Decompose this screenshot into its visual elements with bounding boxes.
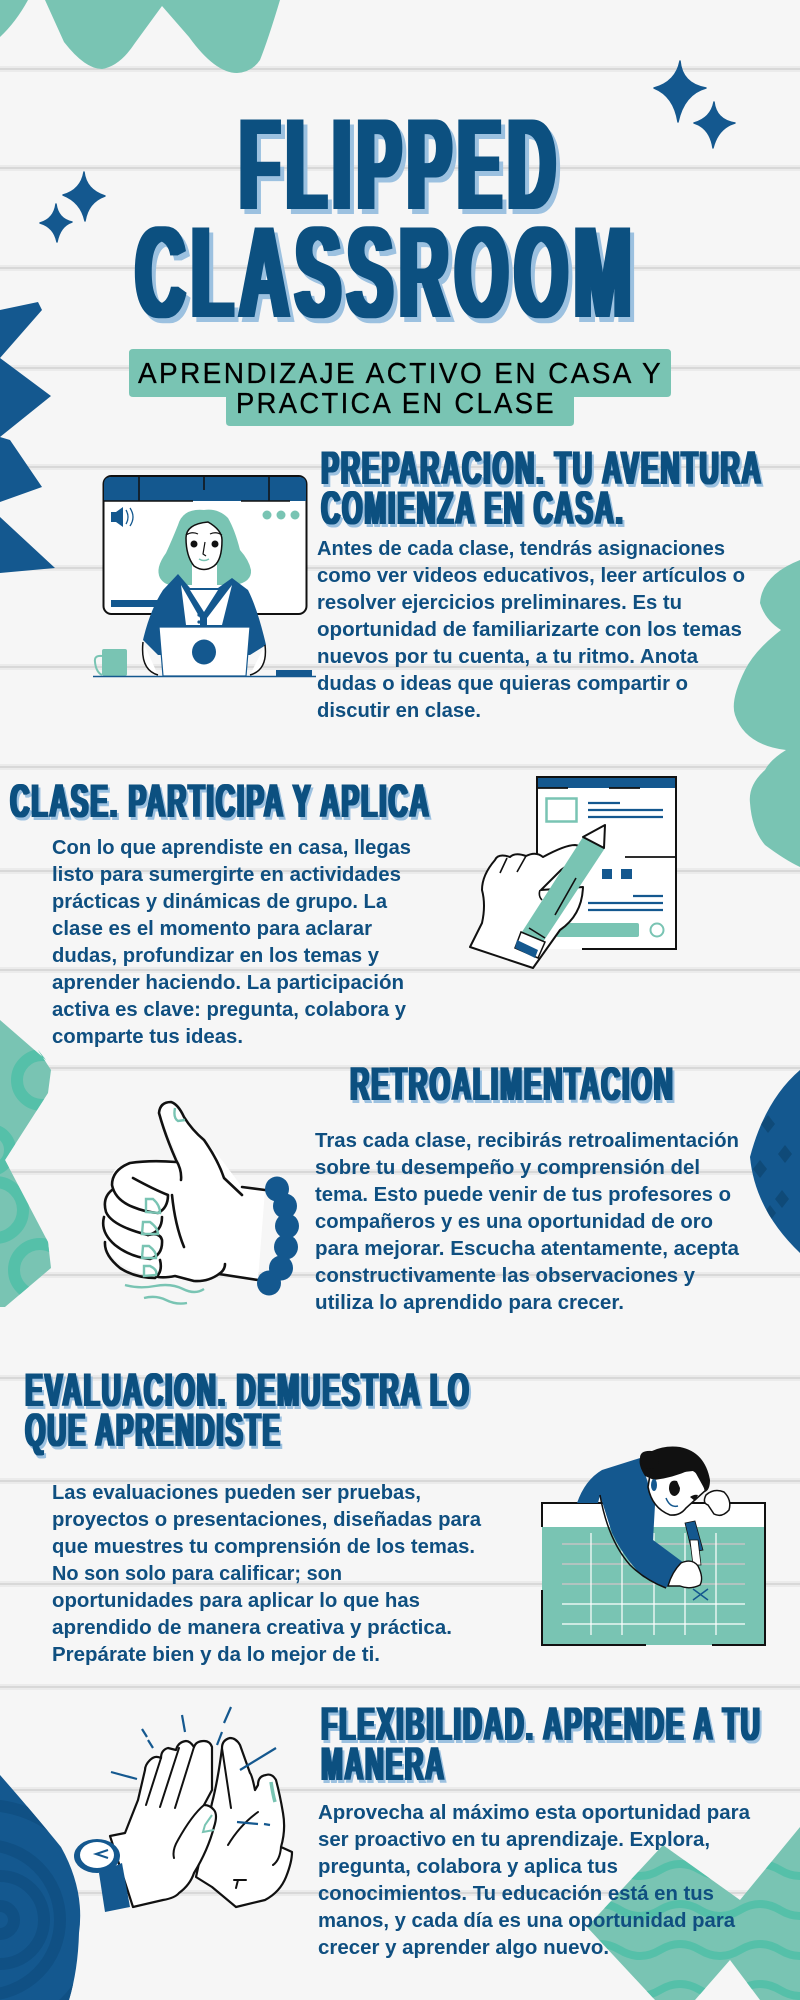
section 1 text: resolver ejercicios preliminares. Es tu: [317, 592, 682, 614]
section 5 text: crecer y aprender algo nuevo.: [318, 1937, 609, 1959]
section 5 text: pregunta, colabora y aplica tus: [318, 1856, 618, 1878]
section 4 text: oportunidades para aplicar lo que has: [52, 1590, 420, 1612]
decoration: left navy star shape: [0, 302, 55, 573]
section 3 text: [315, 1130, 740, 1314]
subtitle pill: [129, 349, 671, 426]
section 5 heading: [321, 1697, 762, 1790]
decoration: top teal shape: [0, 0, 280, 73]
section 1 text: nuevos por tu cuenta, a tu ritmo. Anota: [317, 646, 699, 668]
subtitle pill: APRENDIZAJE ACTIVO EN CASA Y: [138, 358, 663, 390]
section 3 text: para mejorar. Escucha atentamente, acepta: [315, 1238, 740, 1260]
decoration: bottom left navy circles: [0, 1775, 80, 2000]
section 3 text: sobre tu desempeño y comprensión del: [315, 1157, 700, 1179]
section 1 text: Antes de cada clase, tendrás asignaciones: [317, 538, 725, 560]
section 3 text: compañeros y es una oportunidad de oro: [315, 1211, 713, 1233]
section 4 text: aprendido de manera creativa y práctica.: [52, 1617, 452, 1639]
section 5 text: [318, 1802, 751, 1959]
section 4 heading: EVALUACION. DEMUESTRA LO: [25, 1363, 471, 1416]
section 2 text: prácticas y dinámicas de grupo. La: [52, 891, 388, 913]
illustration: hand with pencil on document: [470, 777, 676, 968]
section 1 text: discutir en clase.: [317, 700, 481, 722]
section 2 text: Con lo que aprendiste en casa, llegas: [52, 837, 411, 859]
section 1 heading: [321, 441, 763, 534]
section 2 text: activa es clave: pregunta, colabora y: [52, 999, 407, 1021]
section 4 text: proyectos o presentaciones, diseñadas para: [52, 1509, 482, 1531]
decoration: right navy blob: [750, 1070, 800, 1253]
section 3 text: constructivamente las observaciones y: [315, 1265, 696, 1287]
section 4 text: Prepárate bien y da lo mejor de ti.: [52, 1644, 380, 1666]
icon: sparkle stars: [40, 61, 735, 242]
section 3 text: tema. Esto puede venir de tus profesores o: [315, 1184, 731, 1206]
illustration: high five hands: [74, 1707, 292, 1912]
section 1 text: como ver videos educativos, leer artículos o: [317, 565, 745, 587]
section 5 text: conocimientos. Tu educación está en tus: [318, 1883, 714, 1905]
section 5 text: ser proactivo en tu aprendizaje. Explora,: [318, 1829, 710, 1851]
illustration: thumbs up hand: [103, 1102, 299, 1304]
section 4 text: No son solo para calificar; son: [52, 1563, 342, 1585]
title: [136, 91, 638, 345]
section 1 text: [317, 538, 745, 722]
section 3 text: Tras cada clase, recibirás retroalimentación: [315, 1130, 739, 1152]
section 1 text: dudas o ideas que quieras compartir o: [317, 673, 688, 695]
illustration: person marking a calendar board: [542, 1446, 765, 1645]
section 4 text: [52, 1482, 482, 1666]
section 2 text: [52, 837, 411, 1048]
section 2 text: listo para sumergirte en actividades: [52, 864, 401, 886]
section 3 text: utiliza lo aprendido para crecer.: [315, 1292, 624, 1314]
section 2 heading: CLASE. PARTICIPA Y APLICA: [10, 774, 431, 827]
section 2 text: aprender haciendo. La participación: [52, 972, 404, 994]
illustration: woman on video call: [93, 476, 316, 676]
section 2 text: clase es el momento para aclarar: [52, 918, 372, 940]
section 4 heading: [25, 1363, 471, 1456]
decoration: left teal arcs: [0, 1020, 51, 1307]
section 4 text: que muestres tu comprensión de los temas.: [52, 1536, 475, 1558]
section 2 text: dudas, profundizar en los temas y: [52, 945, 380, 967]
decoration: bottom right teal zigzag: [580, 1820, 800, 2000]
section 5 text: manos, y cada día es una oportunidad para: [318, 1910, 736, 1932]
subtitle pill: PRACTICA EN CLASE: [236, 388, 556, 420]
section 2 text: comparte tus ideas.: [52, 1026, 243, 1048]
section 5 text: Aprovecha al máximo esta oportunidad para: [318, 1802, 751, 1824]
section 5 heading: MANERA: [321, 1737, 446, 1790]
section 4 text: Las evaluaciones pueden ser pruebas,: [52, 1482, 421, 1504]
decoration: right teal blob: [734, 560, 800, 867]
section 4 heading: QUE APRENDISTE: [25, 1403, 282, 1456]
section 1 text: oportunidad de familiarizarte con los temas: [317, 619, 742, 641]
